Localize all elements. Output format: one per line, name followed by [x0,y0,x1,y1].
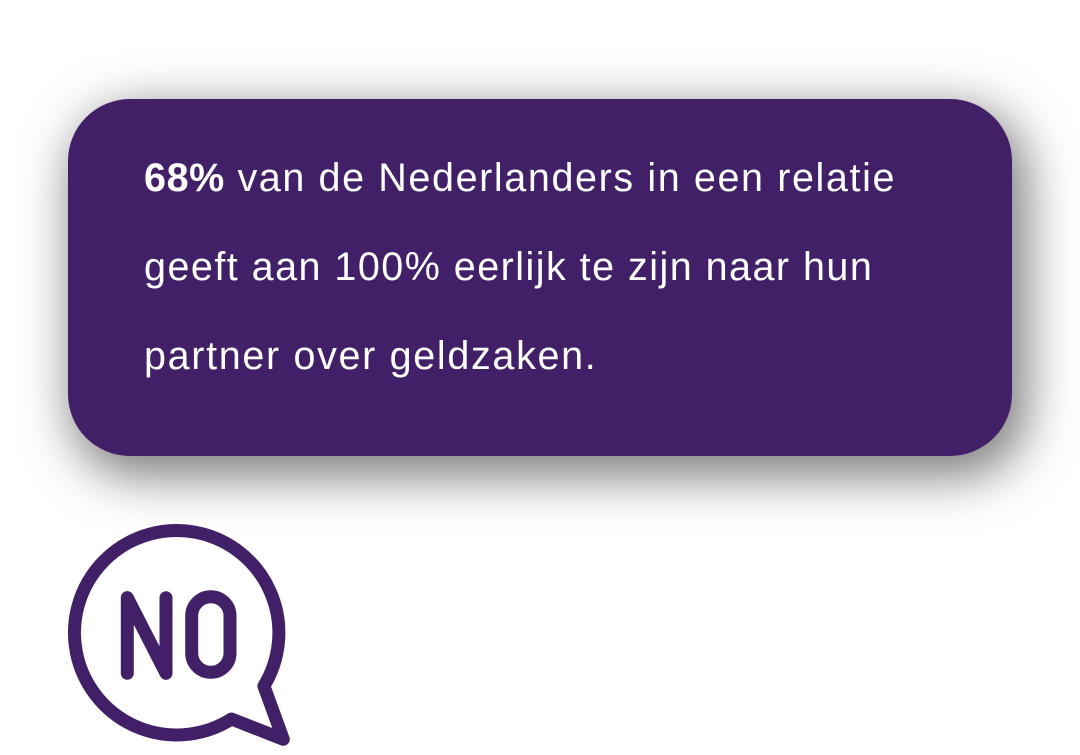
icon: speech bubble outline [74,531,283,739]
icon: letter O [192,597,230,672]
panel: statistic callout [68,99,1012,456]
text line 3: partner over geldzaken. [144,334,597,378]
text line 2: geeft aan 100% eerlijk te zijn naar hun [144,245,873,289]
icon: letter N [127,598,166,673]
icon: speech bubble with NO [68,524,290,746]
text line 1: 68% van de Nederlanders in een relatie [144,156,896,200]
